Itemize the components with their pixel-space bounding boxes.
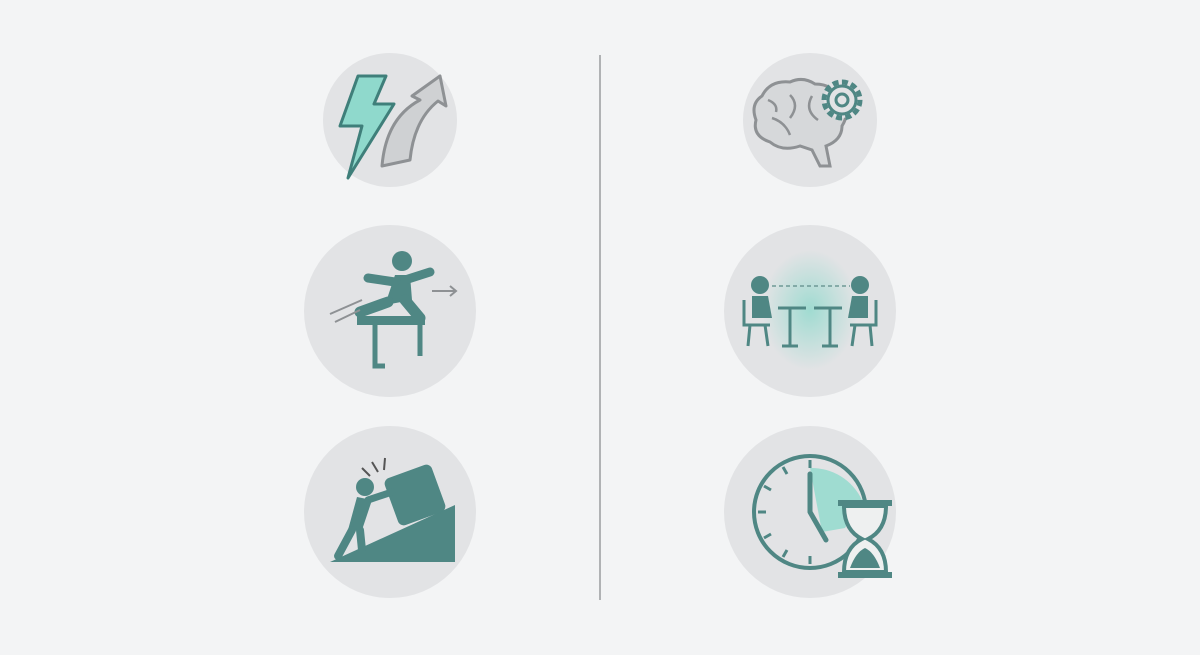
icon: two people at desks [724, 225, 896, 397]
icon: energy bolt and rising arrow [323, 53, 457, 187]
icon: clock and hourglass [724, 426, 896, 598]
icon: pushing boulder uphill [304, 426, 476, 598]
icon: hurdle jumper [304, 225, 476, 397]
icon: brain with gear [743, 53, 877, 187]
